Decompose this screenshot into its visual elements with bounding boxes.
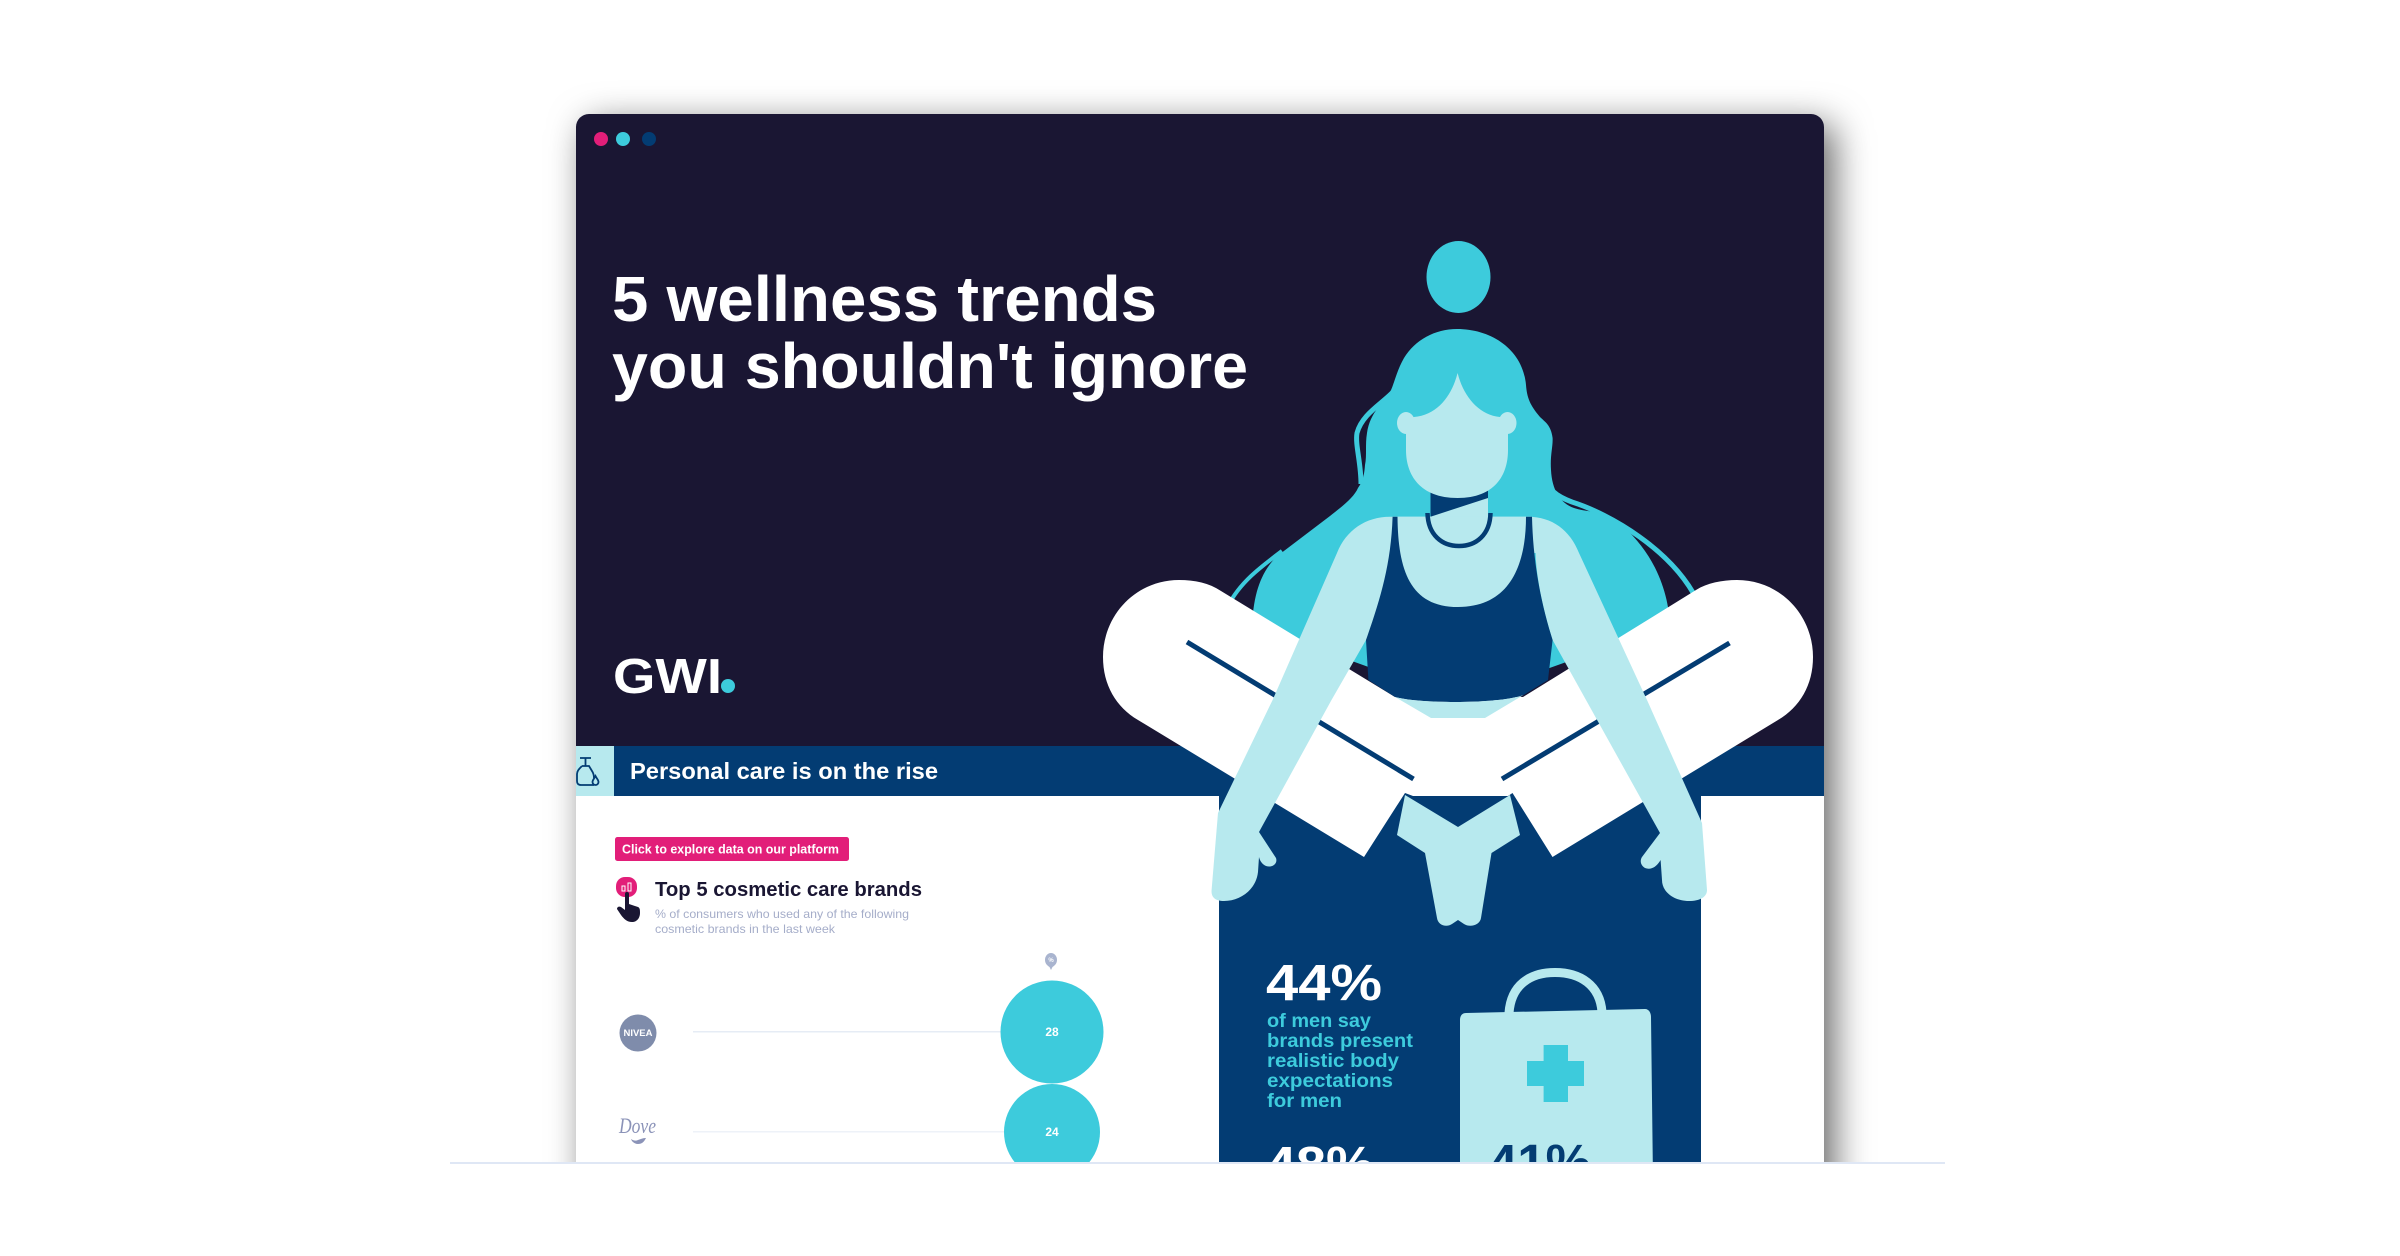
hair bbox=[1252, 329, 1670, 700]
stat: 44%: for men bbox=[1267, 1090, 1342, 1112]
necklace bbox=[1428, 513, 1490, 546]
legs bbox=[1103, 580, 1813, 857]
hair bun bbox=[1426, 241, 1490, 313]
stat: 44%: expectations bbox=[1267, 1070, 1393, 1092]
stat: 44%: 44% bbox=[1266, 954, 1382, 1011]
illustration: woman meditating bbox=[1103, 241, 1813, 926]
row: NIVEA: NIVEA bbox=[624, 1028, 653, 1038]
title: you shouldn't ignore bbox=[612, 330, 1248, 402]
leg crease lines bbox=[1187, 642, 1730, 779]
stat: 44% bbox=[1266, 954, 1414, 1112]
row: NIVEA bbox=[620, 980, 1104, 1084]
section header band bbox=[576, 746, 1824, 796]
chart heading: Top 5 cosmetic care brands bbox=[655, 879, 922, 901]
baseline rule bbox=[450, 1162, 1945, 1164]
row: Dove: 24 bbox=[1045, 1125, 1059, 1139]
lollipop chart bbox=[618, 980, 1104, 1180]
feet bbox=[1397, 795, 1520, 926]
row: Dove bbox=[618, 1084, 1100, 1180]
title bbox=[612, 263, 1248, 402]
GWI logo: GWI bbox=[613, 650, 722, 704]
section heading: Personal care is on the rise bbox=[630, 758, 938, 784]
icon: percent pin: % bbox=[1048, 958, 1054, 964]
neck bbox=[1430, 488, 1488, 518]
chart heading bbox=[655, 879, 922, 936]
icon: chart click bbox=[616, 877, 640, 922]
icon: medical bag bbox=[1460, 972, 1653, 1180]
icon: soap bottle bbox=[577, 758, 598, 785]
stat: 44%: brands present bbox=[1267, 1030, 1414, 1052]
chart heading: cosmetic brands in the last week bbox=[655, 922, 836, 936]
icon: percent pin bbox=[1045, 953, 1057, 970]
arms and chest bbox=[1212, 517, 1707, 901]
cta button: Click to explore data on our platform bbox=[622, 842, 839, 856]
hero panel background bbox=[576, 114, 1824, 746]
row: Dove: Dove bbox=[618, 1113, 656, 1138]
stat: 44%: of men say bbox=[1267, 1010, 1371, 1032]
chart heading: % of consumers who used any of the following bbox=[655, 907, 909, 921]
lap bbox=[1395, 695, 1524, 718]
hair strands bbox=[1228, 391, 1697, 606]
window control dots bbox=[594, 132, 656, 146]
stats panel bbox=[1219, 796, 1701, 1176]
tank top bbox=[1366, 517, 1553, 702]
title: 5 wellness trends bbox=[612, 263, 1157, 335]
cta button bbox=[615, 837, 849, 861]
chest bbox=[1393, 517, 1531, 612]
face bbox=[1397, 373, 1516, 498]
stat: 44%: realistic body bbox=[1267, 1050, 1399, 1072]
row: NIVEA: 28 bbox=[1045, 1025, 1059, 1039]
